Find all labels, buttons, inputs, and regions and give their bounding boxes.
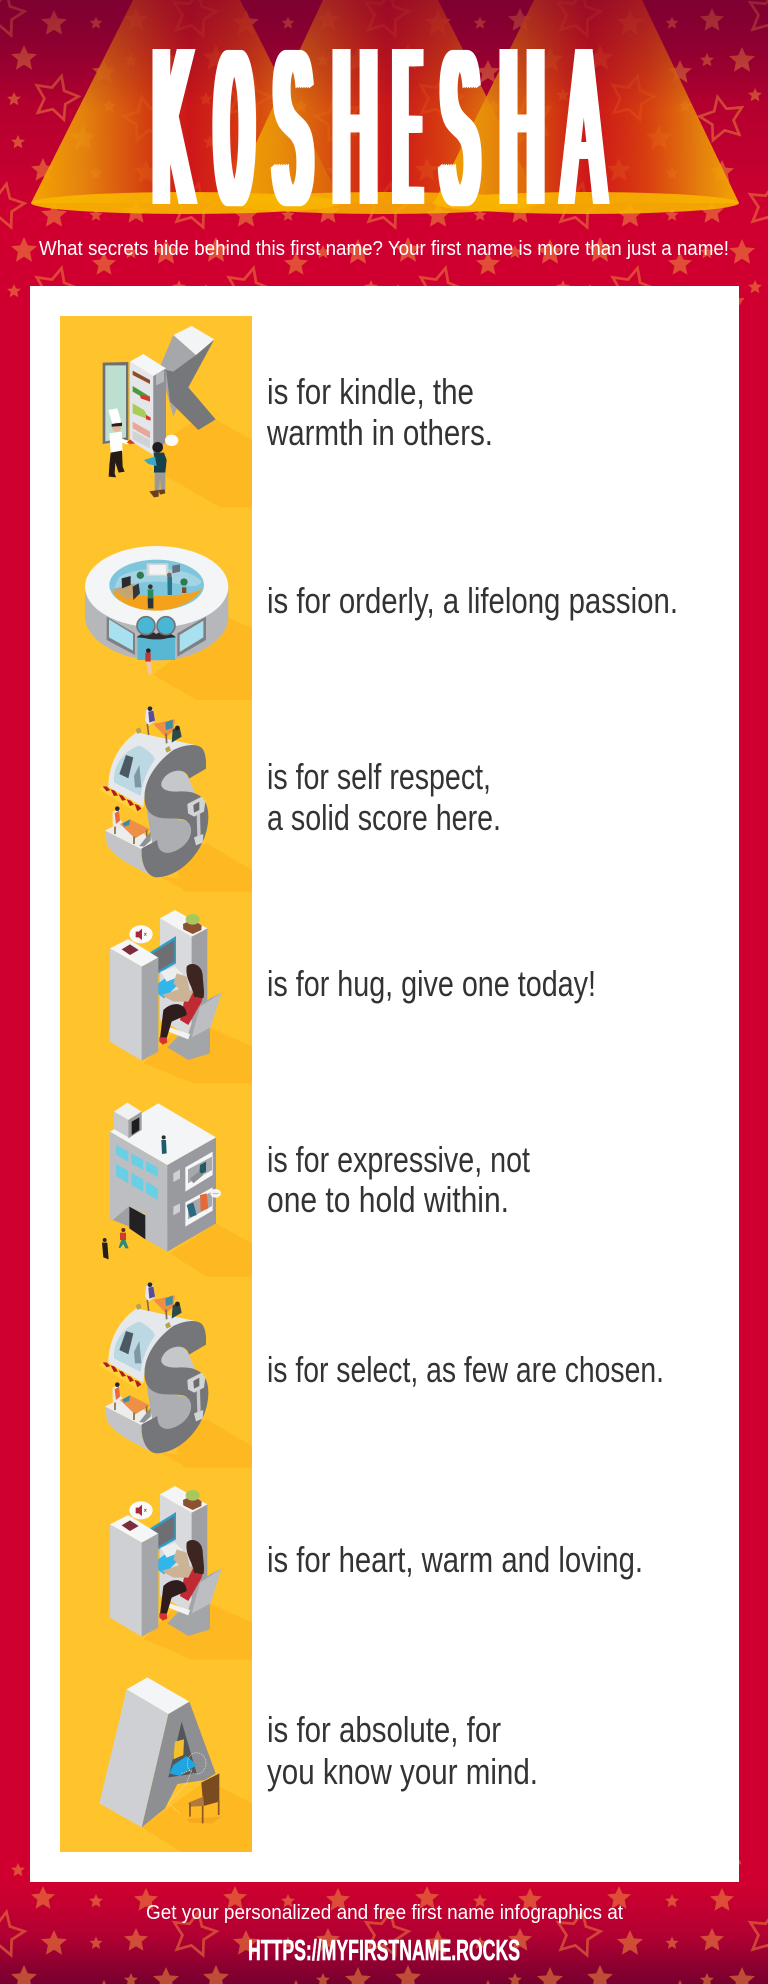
text: S	[267, 756, 501, 838]
title: A	[563, 0, 605, 252]
text: O: is for orderly, a lifelong passion.	[267, 580, 678, 621]
title: K	[154, 0, 192, 252]
icon: letter H with desk worker	[110, 910, 252, 1083]
text: K: is for kindle, the	[267, 371, 474, 412]
footer URL: HTTPS://MYFIRSTNAME.ROCKS	[248, 1935, 520, 1967]
icon: letter S with office (repeat)	[99, 1282, 252, 1468]
text: H: is for hug, give one today!	[267, 963, 596, 1004]
text: A: you know your mind.	[267, 1751, 538, 1792]
text: A: is for absolute, for	[267, 1709, 501, 1750]
text: E: one to hold within.	[267, 1179, 509, 1220]
text: K	[266, 371, 493, 453]
text: K: warmth in others.	[266, 412, 493, 453]
icon: letter S with office	[99, 706, 252, 892]
icon: letter H with desk worker (repeat)	[110, 1486, 252, 1659]
text: A	[267, 1709, 538, 1792]
title: S	[275, 4, 311, 251]
title: O	[217, 4, 251, 251]
text: S: is for self respect,	[267, 756, 491, 797]
icon: letter K with refrigerator	[103, 326, 252, 507]
white content panel	[30, 286, 739, 1882]
icon: letter E office building	[102, 1103, 252, 1277]
text: S second: is for select, as few are chosen.	[267, 1349, 664, 1390]
title: S	[442, 4, 478, 251]
icon: letter O with optician shop	[85, 546, 252, 700]
icon: letter A with chair	[99, 1640, 252, 1852]
text: E: is for expressive, not	[267, 1139, 530, 1180]
body text rows	[266, 371, 678, 1792]
footer prompt: Get your personalized and free first name infographics at	[146, 1902, 623, 1924]
spotlights	[0, 0, 768, 214]
subtitle: What secrets hide behind this first name? Your first name is more than just a name!	[39, 238, 729, 260]
text: H second: is for heart, warm and loving.	[267, 1539, 643, 1580]
title: E	[396, 0, 419, 252]
title	[152, 0, 610, 252]
yellow illustration column	[60, 316, 252, 1852]
text: S: a solid score here.	[267, 797, 501, 838]
title: H	[334, 0, 376, 252]
text: E	[267, 1139, 530, 1220]
title: H	[500, 0, 543, 252]
